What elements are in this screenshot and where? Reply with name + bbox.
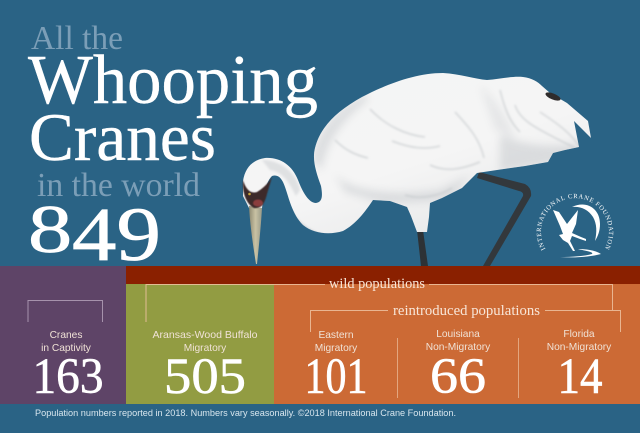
Louisiana number: 66	[430, 349, 486, 405]
Eastern number: 101	[304, 349, 368, 405]
total count: 849	[28, 192, 161, 277]
title line: Cranes: Cranes	[29, 99, 216, 175]
captivity number: 163	[32, 349, 104, 405]
crane near leg	[477, 172, 531, 266]
logo crane silhouette	[553, 210, 586, 251]
logo: International Crane Foundation: INTERNATIONAL CRANE FOUNDATION	[536, 194, 614, 251]
Eastern label: Eastern	[318, 330, 354, 341]
total count: 849: 8	[28, 193, 72, 268]
logo ring text	[541, 198, 609, 249]
captivity bracket	[28, 300, 102, 322]
crane beak	[249, 206, 262, 264]
heading: wild populations: wild populations	[329, 276, 425, 292]
crane tail mark	[544, 91, 562, 102]
crane neck shading	[262, 160, 300, 196]
title	[28, 20, 318, 277]
crane far leg	[417, 230, 428, 266]
heading: reintroduced populations: reintroduced populations	[393, 303, 540, 319]
crane red crown	[253, 200, 263, 206]
Eastern label: Migratory	[315, 343, 358, 354]
crane eye	[248, 193, 251, 195]
Aransas number: 505	[164, 349, 246, 405]
panel: cranes in captivity	[0, 266, 126, 405]
title line: in the world: in the world	[37, 167, 200, 204]
footer note: Population numbers reported in 2018. Numbers vary seasonally. ©2018 International Crane Foundation.	[35, 408, 456, 419]
illustration: whooping crane	[238, 70, 598, 266]
crane body and neck	[238, 70, 598, 240]
Aransas label: Migratory	[184, 343, 227, 354]
captivity label: Cranes	[50, 330, 82, 341]
title line: Whooping: Whooping	[28, 42, 318, 119]
Aransas label: Aransas-Wood Buffalo	[152, 330, 258, 341]
panel: reintroduced populations	[274, 284, 640, 405]
crane wing feathers	[335, 90, 579, 197]
Florida number: 14	[558, 349, 602, 405]
crane body shading	[314, 96, 578, 204]
Florida label: Non-Migratory	[547, 342, 612, 353]
Florida label: Florida	[563, 329, 595, 340]
panel: Aransas-Wood Buffalo	[126, 284, 274, 405]
title line: All the: All the	[31, 20, 123, 57]
total count: 849: 49	[72, 192, 161, 277]
crane face patch	[243, 177, 272, 208]
logo arc	[572, 204, 600, 241]
panel: wild populations header	[126, 266, 640, 284]
captivity label: in Captivity	[41, 343, 92, 354]
Louisiana label: Louisiana	[436, 329, 480, 340]
logo water swoosh	[560, 249, 601, 257]
Louisiana label: Non-Migratory	[426, 342, 491, 353]
